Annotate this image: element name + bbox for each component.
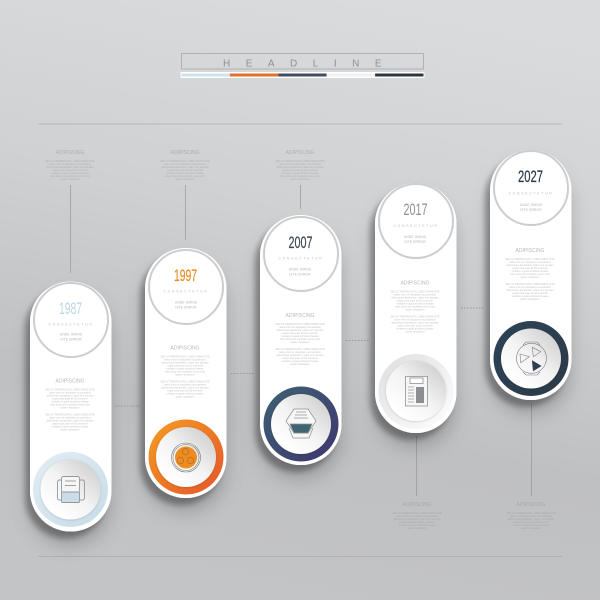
panel: 1997: natus error sit voluptatem accusantium [164,384,206,386]
panel: 1987: doloremque laudantium, totam rem aperiam [46,394,94,398]
top rule [38,124,562,125]
panel: 2007: ipsam voluptatem [290,363,310,366]
bottom rule [38,556,562,557]
side note 2: doloremque laudantium, totam rem aperiam [161,166,209,169]
panel: 1997: vitae dicta sunt explicabo nemo enim [165,370,205,374]
side note 1: doloremque laudantium, totam rem aperiam [46,166,94,169]
side note 1: veritatis et quasi architecto beatae [52,172,89,175]
side note 3: ipsam voluptatem [290,178,310,181]
headline: HEADLINE [223,58,397,70]
panel: 2007: UNDE OMNIS [289,268,311,272]
panel: 2017: veritatis et quasi architecto beatae [396,328,434,330]
connector 1 [115,405,140,407]
panel: 1987: doloremque laudantium, totam rem aperiam [46,420,94,422]
side note 3: SED UT PERSPICIATIS, UNDE OMNIS ISTE [275,160,325,163]
year 2027: 2027 [518,167,543,186]
panel: 1987: veritatis et quasi architecto beatae [52,426,89,428]
panel: 1997: doloremque laudantium, totam rem aperiam [161,386,209,390]
icon: document tray [286,409,316,438]
panel: 1987: UNDE OMNIS [60,332,82,336]
panel: 1997: veritatis et quasi architecto beatae [166,368,204,370]
panel: 1987: eaque ipsa quae ab illo inventore [52,398,89,400]
panel: 2007: doloremque laudantium, totam rem aperiam [276,329,324,332]
panel: 2007: ADIPISCING [286,313,315,319]
side note 2: ADIPISCING [171,150,200,156]
panel: 2017: SED UT PERSPICIATIS, UNDE OMNIS ISTE [390,316,440,318]
side note 1: eaque ipsa quae ab illo inventore [52,169,89,172]
panel: 2027: ISTE ERROR [520,208,542,212]
panel: 2017: veritatis et quasi architecto beatae [396,302,434,306]
side note 1: ipsam voluptatem [60,178,80,181]
panel: 2007 [260,215,342,465]
panel: 2017 [375,183,456,433]
headline [180,54,424,78]
panel: 1997: ipsam voluptatem [175,396,195,398]
panel: 2017: SED UT PERSPICIATIS, UNDE OMNIS ISTE [390,290,440,294]
panel: 2017: eaque ipsa quae ab illo inventore [397,324,434,328]
side note 4: ADIPISCING [403,502,432,508]
panel: 1987: natus error sit voluptatem accusantium [49,416,91,420]
panel: 2017: eaque ipsa quae ab illo inventore [397,300,434,302]
side note 2: natus error sit voluptatem accusantium [164,163,206,166]
panel: 2007: vitae dicta sunt explicabo nemo enim [280,338,320,341]
panel: 2027 [490,150,572,400]
side note 1: natus error sit voluptatem accusantium [49,163,91,166]
side note 2: SED UT PERSPICIATIS, UNDE OMNIS ISTE [160,160,210,163]
side note 3: doloremque laudantium, totam rem aperiam [276,166,324,169]
panel: 2007: ISTE ERROR [289,272,311,276]
panel: 2027: veritatis et quasi architecto beatae [512,295,549,298]
side note 3: vitae dicta sunt explicabo nemo enim [280,175,320,178]
panel: 1997: veritatis et quasi architecto beatae [166,392,204,396]
panel: 2007: doloremque laudantium, totam rem aperiam [276,354,324,357]
connector 2 [231,372,254,374]
side note 2: veritatis et quasi architecto beatae [166,172,204,175]
panel: 1987: SED UT PERSPICIATIS, UNDE OMNIS ISTE [45,414,95,416]
panel: 1987: vitae dicta sunt explicabo nemo enim [50,404,90,406]
side note 2: ipsam voluptatem [175,178,195,181]
panel: 1987: ipsam voluptatem [60,428,80,432]
panel: 2007: eaque ipsa quae ab illo inventore [282,332,319,335]
side note 3: natus error sit voluptatem accusantium [279,163,321,166]
panel: 2027: eaque ipsa quae ab illo inventore [512,292,549,295]
side note 3: veritatis et quasi architecto beatae [282,172,319,175]
icon: pie dial [516,342,546,375]
panel: 2007: veritatis et quasi architecto beatae [282,335,319,338]
panel: 1997: eaque ipsa quae ab illo inventore [167,364,204,368]
panel: 1987: veritatis et quasi architecto beatae [52,400,89,404]
panel: 1997: ipsam voluptatem [175,374,195,376]
year 1987: 1987 [59,299,82,318]
side note 5: veritatis et quasi architecto beatae [512,524,550,527]
panel: 1987: ADIPISCING [56,378,85,384]
side note 4: veritatis et quasi architecto beatae [398,524,436,527]
panel: 2007: ipsam voluptatem [290,341,310,344]
year 1997: 1997 [174,266,197,285]
side note 5: eaque ipsa quae ab illo inventore [513,521,550,524]
side note 4: natus error sit voluptatem accusantium [396,515,438,518]
panel: 2027: ipsam voluptatem [520,298,540,301]
side note 4: eaque ipsa quae ab illo inventore [399,521,436,524]
panel: 1987: eaque ipsa quae ab illo inventore [52,422,89,426]
side note 5: natus error sit voluptatem accusantium [510,515,552,518]
side note 3 [275,150,325,209]
side note 4 [392,436,442,530]
connector 3 [346,340,369,342]
icon: handheld device [406,376,428,406]
panel: 1987: ipsam voluptatem [60,406,80,410]
panel: 2017: ISTE ERROR [404,240,426,244]
panel: 2017: natus error sit voluptatem accusantium [394,318,436,322]
panel: 2027: ipsam voluptatem [520,276,540,279]
panel: 1997: ISTE ERROR [175,306,197,310]
panel: 1997: doloremque laudantium, totam rem aperiam [161,362,209,364]
side note 2 [160,150,210,240]
panel: 2027: SED UT PERSPICIATIS, UNDE OMNIS ISTE [505,258,555,261]
year 2007: 2007 [288,233,312,252]
panel: 2007: veritatis et quasi architecto beatae [282,360,319,363]
year 2017: 2017 [404,200,428,219]
panel: 2007: natus error sit voluptatem accusantium [279,326,321,329]
side note 3: ADIPISCING [286,150,315,156]
panel: 2017: vitae dicta sunt explicabo nemo enim [395,306,435,308]
side note 4: SED UT PERSPICIATIS, UNDE OMNIS ISTE [392,512,442,515]
icon: film reel [172,443,200,472]
panel: 2017: UNDE OMNIS [404,235,426,239]
panel: 2017: ipsam voluptatem [405,308,425,312]
side note 5: ADIPISCING [517,502,546,508]
side note 4: ipsam voluptatem [407,527,427,530]
panel: 2027: natus error sit voluptatem accusantium [509,286,551,289]
panel: 2027: UNDE OMNIS [520,203,542,207]
panel: 2027: eaque ipsa quae ab illo inventore [512,267,549,270]
side note 2: vitae dicta sunt explicabo nemo enim [165,175,205,178]
panel: 2027: doloremque laudantium, totam rem aperiam [506,289,554,292]
panel: 2017: natus error sit voluptatem accusantium [394,294,436,296]
panel: 2027: doloremque laudantium, totam rem aperiam [506,264,554,267]
panel: 1987: SED UT PERSPICIATIS, UNDE OMNIS ISTE [45,388,95,392]
panel: 2027: vitae dicta sunt explicabo nemo enim [510,273,550,276]
panel: 2027: natus error sit voluptatem accusantium [509,261,551,264]
panel: 2017: doloremque laudantium, totam rem aperiam [391,322,439,324]
side note 1: SED UT PERSPICIATIS, UNDE OMNIS ISTE [45,160,95,163]
panel: 2017: ADIPISCING [401,280,430,286]
panel: 1987 [30,282,112,532]
side note 5: SED UT PERSPICIATIS, UNDE OMNIS ISTE [506,512,556,515]
side note 2: eaque ipsa quae ab illo inventore [167,169,204,172]
panel: 2027: veritatis et quasi architecto beatae [512,270,549,273]
panel: 1997 [145,248,226,498]
panel: 1987: CONSECTETUR [48,322,94,326]
panel: 2007: SED UT PERSPICIATIS, UNDE OMNIS ISTE [275,323,325,326]
panel: 1997: UNDE OMNIS [175,300,197,304]
side note 4: doloremque laudantium, totam rem aperiam [393,518,441,521]
panel: 2007: CONSECTETUR [278,256,324,260]
panel: 1997: natus error sit voluptatem accusantium [164,358,206,362]
panel: 1987: ISTE ERROR [60,338,82,342]
connector 4 [461,307,484,309]
panel: 1997: SED UT PERSPICIATIS, UNDE OMNIS ISTE [160,356,210,358]
panel: 2017: doloremque laudantium, totam rem aperiam [391,296,439,300]
panel: 2007: natus error sit voluptatem accusantium [279,351,321,354]
panel: 1997: eaque ipsa quae ab illo inventore [167,390,204,392]
panel: 1997: SED UT PERSPICIATIS, UNDE OMNIS ISTE [160,380,210,384]
icon: printer [58,476,84,502]
panel: 2027: SED UT PERSPICIATIS, UNDE OMNIS ISTE [505,283,555,286]
panel: 2027: ADIPISCING [516,248,545,254]
side note 1: vitae dicta sunt explicabo nemo enim [50,175,90,178]
side note 1: ADIPISCING [56,150,85,156]
side note 1 [45,150,95,273]
side note 3: eaque ipsa quae ab illo inventore [282,169,319,172]
side note 5: ipsam voluptatem [521,527,541,530]
panel: 2027: CONSECTETUR [508,192,554,196]
side note 5: doloremque laudantium, totam rem aperiam [507,518,555,521]
panel: 1997: ADIPISCING [171,346,200,352]
side note 5 [506,404,556,530]
panel: 1997: CONSECTETUR [163,290,209,294]
panel: 2007: eaque ipsa quae ab illo inventore [282,357,319,360]
panel: 1987: natus error sit voluptatem accusantium [49,392,91,394]
panel: 2017: ipsam voluptatem [405,330,425,334]
panel: 2017: CONSECTETUR [393,224,439,228]
panel: 2007: SED UT PERSPICIATIS, UNDE OMNIS ISTE [275,348,325,351]
